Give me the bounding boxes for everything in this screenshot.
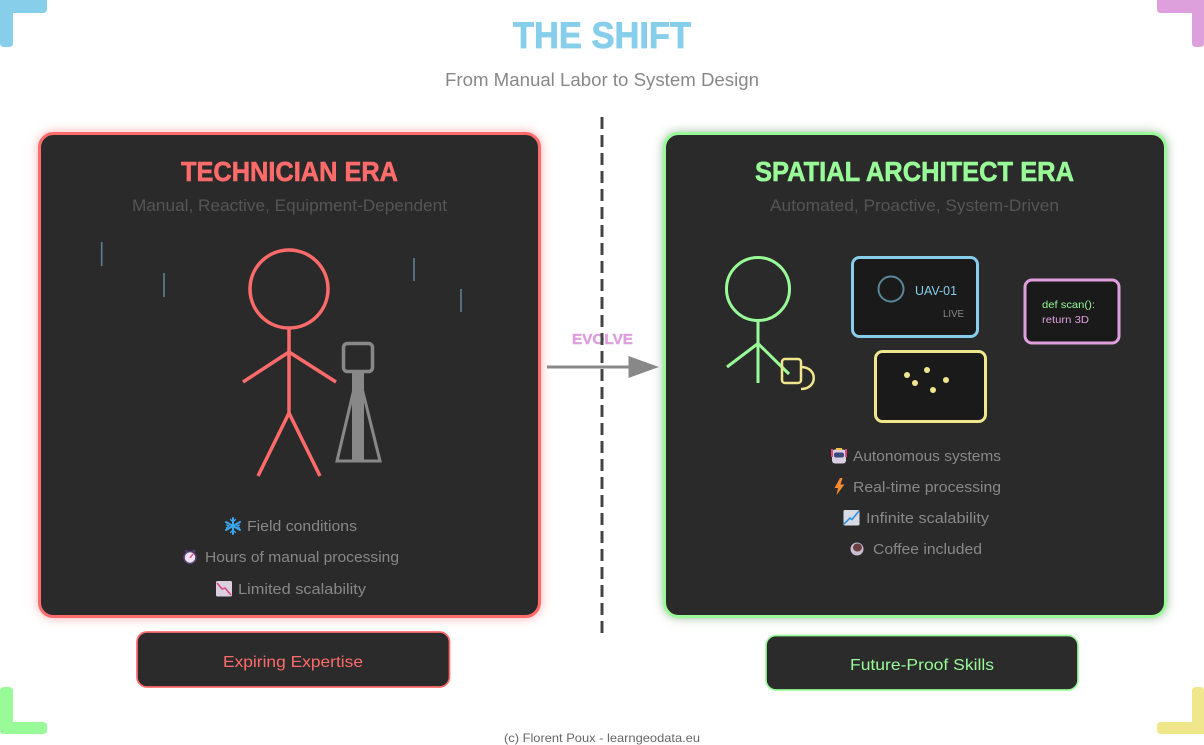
badge: future-proof skills: Future-Proof Skills [850,657,994,674]
card: code snippet: return 3D [1042,314,1089,326]
text: field conditions: Field conditions [247,518,357,535]
card: UAV status [852,258,978,336]
divider: dashed line [600,117,604,633]
title: THE SHIFT [513,15,691,56]
corner bracket: top left [0,0,47,47]
text: limited scalability: Limited scalability [238,581,367,598]
stick figure: technician [243,250,336,476]
card: code snippet: def scan(): [1042,299,1095,311]
icon: coffee cup [850,542,864,556]
icon: rising chart [844,510,860,526]
card: UAV status: LIVE [943,309,964,320]
panel subtitle: Manual, Reactive, Equipment-Dependent [132,196,447,215]
text: coffee included: Coffee included [873,541,982,558]
icon: robot [831,448,847,464]
text: infinite scalability: Infinite scalability [866,510,990,527]
card: point cloud [876,352,986,422]
icon: tripod scanner [337,344,380,462]
text: real-time processing: Real-time processing [853,479,1001,496]
panel: technician era [40,134,540,616]
stick figure: architect [726,258,790,383]
heading: spatial architect era: SPATIAL ARCHITECT ERA [755,156,1074,187]
icon: stopwatch [184,550,196,564]
card: UAV status: UAV-01 [915,283,957,298]
icon: coffee mug [782,359,814,389]
label: evolve: EVOLVE [572,332,633,348]
list: architect benefits [831,448,1001,558]
panel subtitle: Automated, Proactive, System-Driven [770,196,1059,215]
footer credit: (c) Florent Poux - learngeodata.eu [504,731,700,745]
icon: falling chart [216,581,232,596]
icon: lightning [834,478,844,495]
list: technician pain points [184,518,399,598]
text: manual processing: Hours of manual processing [205,549,399,566]
corner bracket: bottom left [0,687,47,734]
heading: technician era: TECHNICIAN ERA [181,156,398,187]
badge: expiring expertise: Expiring Expertise [223,654,363,671]
subtitle: From Manual Labor to System Design [445,70,759,90]
corner bracket: top right [1157,0,1204,47]
card: code snippet [1025,280,1119,343]
panel: spatial architect era [664,134,1166,616]
arrow: evolve [547,356,659,378]
badge: future-proof skills [766,636,1078,690]
rain streaks [102,242,461,312]
text: autonomous systems: Autonomous systems [853,448,1001,465]
corner bracket: bottom right [1157,687,1204,734]
badge: expiring expertise [137,632,450,687]
icon: snowflake [226,518,240,534]
